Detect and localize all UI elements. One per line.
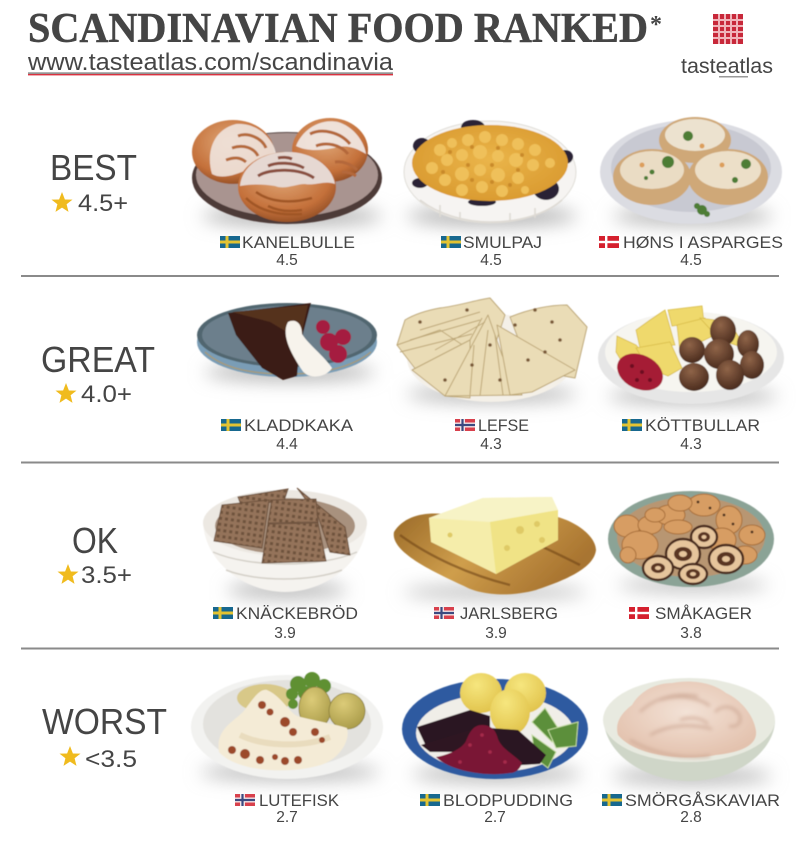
label: smulpaj: SMULPAJ xyxy=(463,233,542,252)
label: köttbullar: KÖTTBULLAR xyxy=(645,416,760,435)
label: kladdkaka xyxy=(221,416,354,453)
label: lefse xyxy=(455,416,529,453)
food: kanelbulle xyxy=(192,118,382,224)
label: jarlsberg: JARLSBERG xyxy=(460,604,558,623)
label: kladdkaka: KLADDKAKA xyxy=(244,416,354,435)
label: jarlsberg xyxy=(434,604,558,642)
food shadows xyxy=(200,206,778,784)
label: kanelbulle: 4.5 xyxy=(276,252,298,269)
tier label: ok xyxy=(58,520,132,589)
label: smörgåskaviar: 2.8 xyxy=(680,809,702,826)
label: smulpaj: 4.5 xyxy=(480,252,502,269)
label: lefse: 4.3 xyxy=(480,436,502,453)
row 1 labels xyxy=(220,233,783,269)
label: blodpudding xyxy=(420,791,573,826)
label: smörgåskaviar xyxy=(602,791,780,826)
food: lutefisk xyxy=(191,672,383,779)
website link with underline: www.tasteatlas.com/scandinavia xyxy=(27,49,394,76)
label: lutefisk: LUTEFISK xyxy=(259,791,340,810)
tier label: worst xyxy=(42,701,167,773)
food: knäckebröd xyxy=(203,488,367,592)
tier label: worst: WORST xyxy=(42,701,167,742)
food: småkager xyxy=(608,491,774,587)
label: blodpudding: BLODPUDDING xyxy=(443,791,573,810)
label: knäckebröd: KNÄCKEBRÖD xyxy=(236,604,358,623)
row 4 labels xyxy=(235,791,780,826)
tier label: worst: <3.5 xyxy=(85,746,137,773)
food: smulpaj xyxy=(404,120,576,223)
label: småkager: 3.8 xyxy=(680,625,702,642)
row 3 labels xyxy=(213,604,752,642)
label: kanelbulle: KANELBULLE xyxy=(242,233,355,252)
tier label: great: 4.0+ xyxy=(81,381,132,408)
label: lutefisk: 2.7 xyxy=(276,809,298,826)
food: blodpudding xyxy=(402,673,588,779)
label: smörgåskaviar: SMÖRGÅSKAVIAR xyxy=(625,791,780,810)
title: SCANDINAVIAN FOOD RANKED xyxy=(28,6,648,52)
tier label: great: GREAT xyxy=(41,339,155,380)
label: kanelbulle xyxy=(220,233,355,269)
tier label: ok: 3.5+ xyxy=(81,562,132,589)
tier label: best: BEST xyxy=(50,147,137,188)
food: köttbullar xyxy=(598,306,784,404)
tier label: ok: OK xyxy=(72,520,118,561)
label: småkager xyxy=(629,604,752,642)
row 2 labels xyxy=(221,416,760,453)
food: kladdkaka xyxy=(197,303,377,380)
label: jarlsberg: 3.9 xyxy=(485,625,507,642)
food: jarlsberg xyxy=(394,497,596,594)
logo: tasteatlas: tasteatlas xyxy=(681,55,773,78)
label: blodpudding: 2.7 xyxy=(484,809,506,826)
food: lefse xyxy=(397,298,587,402)
row dividers xyxy=(21,275,779,650)
label: lutefisk xyxy=(235,791,340,826)
label: høns i asparges: 4.5 xyxy=(680,252,702,269)
label: småkager: SMÅKAGER xyxy=(655,604,752,623)
label: lefse: LEFSE xyxy=(478,416,529,435)
label: høns i asparges xyxy=(599,233,783,269)
title asterisk: * xyxy=(650,12,662,38)
label: kladdkaka: 4.4 xyxy=(276,436,298,453)
tier label: best xyxy=(50,147,137,217)
label: köttbullar xyxy=(622,416,760,453)
logo: tasteatlas xyxy=(681,14,773,78)
tier label: great xyxy=(41,339,155,408)
food: høns i asparges xyxy=(600,117,782,224)
tier label: best: 4.5+ xyxy=(78,190,128,217)
label: høns i asparges: HØNS I ASPARGES xyxy=(623,233,783,252)
label: smulpaj xyxy=(441,233,542,269)
label: knäckebröd xyxy=(213,604,358,642)
label: köttbullar: 4.3 xyxy=(680,436,702,453)
food: smörgåskaviar xyxy=(603,678,775,781)
label: knäckebröd: 3.9 xyxy=(274,625,296,642)
